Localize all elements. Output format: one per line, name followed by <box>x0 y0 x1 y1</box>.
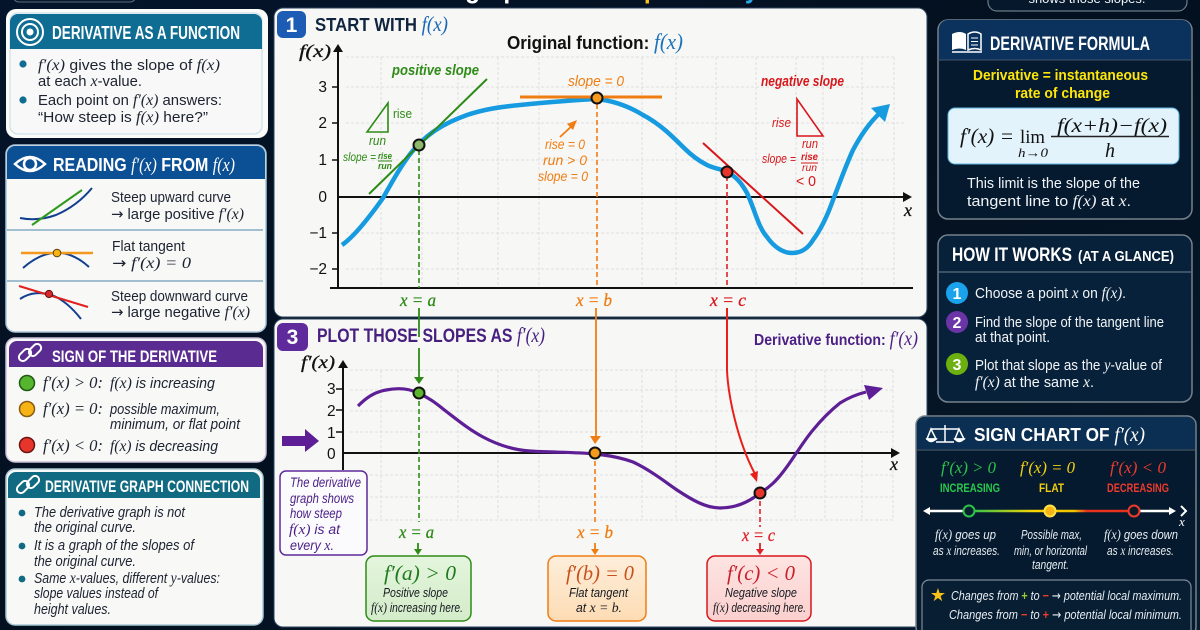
axes <box>330 44 913 288</box>
number line <box>923 506 1186 529</box>
item: flat: f′(x) = 0: <box>43 399 103 418</box>
row: flat tangent <box>21 238 191 272</box>
box: f'(c) < 0: f(x) decreasing here. <box>713 601 806 616</box>
bullet list: The derivative graph is not <box>34 505 186 521</box>
heading: how it works: (AT A GLANCE) <box>1078 249 1174 265</box>
bullets: at each x-value. <box>38 73 142 90</box>
x labels: x = a <box>399 290 436 310</box>
guides with arrows <box>418 393 760 551</box>
tangent: negative: rise <box>772 115 791 130</box>
panel: plot those slopes <box>274 319 927 627</box>
tangent: negative: negative slope <box>761 73 844 90</box>
step 1 <box>946 282 1126 304</box>
column: decreasing: DECREASING <box>1107 481 1169 495</box>
x labels: x = a <box>398 522 434 542</box>
x labels: x = b <box>575 290 612 310</box>
column: flat: min, or horizontal <box>1014 543 1088 558</box>
axis labels: 3 <box>318 79 327 96</box>
tangent: positive: rise <box>393 106 412 121</box>
header: sign <box>9 341 263 367</box>
box: f'(b) = 0: f′(b) = 0 <box>566 561 634 585</box>
point a' <box>414 388 424 398</box>
curve f(x) <box>342 99 890 253</box>
icon: star: ★ <box>930 585 946 606</box>
point c <box>722 166 732 178</box>
callout: derivative graph <box>280 471 367 555</box>
item: decreasing <box>20 436 218 455</box>
arrowhead: a <box>414 549 422 555</box>
note box: Changes from + to − → potential local maximum. <box>951 588 1182 604</box>
chart: original function f(x) <box>299 41 913 310</box>
note box: Changes from − to + → potential local minimum. <box>949 607 1182 623</box>
tangent: negative: < 0 <box>796 173 816 190</box>
chart: derivative f'(x): f′(x) <box>301 352 335 373</box>
panel: sign of the derivative <box>6 338 266 462</box>
header: reading: READING f′(x) FROM f(x) <box>53 154 235 176</box>
icon: link <box>15 474 41 495</box>
text: instantaneous rate <box>973 67 1148 102</box>
box: f'(a) > 0: Positive slope <box>383 586 448 600</box>
item: increasing: f(x) is increasing <box>110 375 215 392</box>
row: steep upward curve: → large positive f′(x) <box>111 205 244 223</box>
bullets: f′(x) gives the slope of f(x) <box>38 57 220 74</box>
point a <box>414 140 424 150</box>
axis labels: 1 <box>318 152 327 169</box>
bullets: Each point on f′(x) answers: <box>38 92 222 109</box>
step 2 <box>946 311 1164 346</box>
header: formula <box>938 20 1192 60</box>
box: f'(c) < 0: f′(c) < 0 <box>727 561 795 585</box>
chart: derivative f'(x): x <box>889 454 898 474</box>
top-left cropped panel <box>13 0 136 2</box>
axis labels: −2 <box>309 261 327 278</box>
step 3 <box>946 353 1163 391</box>
row: steep downward curve: → large negative f′(x) <box>111 303 250 321</box>
x labels: x = c <box>709 290 746 310</box>
formula box: f(x+h)−f(x) <box>1057 115 1167 137</box>
tangent: negative: run <box>802 136 818 151</box>
header: sign chart <box>916 417 1196 450</box>
panel: start with f(x) <box>274 8 927 317</box>
callout: derivative graph: graph shows <box>290 491 354 506</box>
item: flat: possible maximum, <box>109 402 220 418</box>
row: steep upward curve: Steep upward curve <box>111 189 231 206</box>
text: instantaneous rate: Derivative = instantaneous <box>973 67 1148 84</box>
top-right cropped panel <box>988 0 1187 11</box>
tangent: positive: rise <box>378 151 393 162</box>
row: flat tangent: → f′(x) = 0 <box>112 254 191 272</box>
step 1: Choose a point x on f(x). <box>975 285 1126 302</box>
formula box: lim <box>1020 127 1045 148</box>
point b <box>592 92 602 104</box>
step 2: at that point. <box>975 329 1050 346</box>
tangent: positive <box>343 62 487 194</box>
panel: how it works <box>938 235 1192 402</box>
tangent: negative: rise <box>801 152 818 163</box>
tangent: flat: run > 0 <box>543 152 587 168</box>
axis labels: −1 <box>309 225 327 242</box>
text: limit note <box>967 175 1140 210</box>
heading: how it works: HOW IT WORKS <box>952 245 1072 266</box>
dashed guides <box>419 104 727 288</box>
column: decreasing: f′(x) < 0 <box>1110 458 1167 477</box>
chart title: derivative function: Derivative function: f′(x) <box>754 328 918 350</box>
header: derivative as a function: DERIVATIVE AS A FUNCTION <box>52 22 240 43</box>
column: increasing: f(x) goes up <box>935 527 996 543</box>
step 2: 2 <box>953 315 962 332</box>
tangent: flat: slope = 0 <box>538 168 588 184</box>
formula box <box>948 108 1179 164</box>
text: limit note: This limit is the slope of the <box>967 175 1140 192</box>
column: decreasing <box>1104 458 1178 559</box>
column: increasing: as x increases. <box>933 543 1000 559</box>
chart: derivative f'(x) <box>301 352 900 555</box>
row: steep downward curve <box>19 286 250 321</box>
chart title: original function: Original function: f(x) <box>507 29 683 54</box>
icon: eye <box>15 157 45 171</box>
x labels <box>399 290 746 310</box>
step 1: 1 <box>953 286 962 303</box>
step 2: Find the slope of the tangent line <box>975 314 1164 331</box>
tangent: negative: run <box>802 163 817 174</box>
axis labels: 3 <box>327 381 336 398</box>
callout: derivative graph: The derivative <box>290 475 361 490</box>
step 3: f′(x) at the same x. <box>975 374 1094 391</box>
bullet list: the original curve. <box>34 520 136 536</box>
chart: original function f(x): x <box>903 200 912 220</box>
step 3: Plot that slope as the y-value of <box>975 357 1163 374</box>
column: increasing: f′(x) > 0 <box>941 458 997 477</box>
axis labels <box>327 381 336 463</box>
arrowhead: c <box>756 549 764 555</box>
column: flat <box>1014 458 1088 572</box>
item: increasing <box>20 373 215 392</box>
text: instantaneous rate: rate of change <box>1015 85 1110 102</box>
badge: step 1 <box>277 11 306 38</box>
panel: derivative formula <box>938 20 1192 219</box>
heading: how it works <box>952 245 1174 266</box>
axis labels: 1 <box>327 425 336 442</box>
x labels: x = c <box>741 525 775 545</box>
box: f'(a) > 0 <box>366 556 471 621</box>
item: increasing: f′(x) > 0: <box>43 373 103 392</box>
header: reading <box>7 146 265 179</box>
tangent: positive: run <box>369 133 386 148</box>
point c' <box>754 488 766 498</box>
chart: original function f(x): f(x) <box>299 41 331 62</box>
box: f'(b) = 0: Flat tangent <box>569 586 628 600</box>
column: flat: Possible max, <box>1021 527 1082 542</box>
header: derivative as a function <box>10 14 262 49</box>
tangent: positive: slope = <box>343 150 376 164</box>
bullet list: slope values instead of <box>34 586 160 602</box>
item: flat: minimum, or flat point <box>110 417 241 433</box>
row: steep upward curve <box>20 188 244 225</box>
arrowhead: b <box>591 549 599 555</box>
header: connection <box>8 472 260 498</box>
heading: plot those slopes: PLOT THOSE SLOPES AS f′(x) <box>317 323 545 347</box>
axis labels: 0 <box>318 189 327 206</box>
badge: step 3 <box>277 323 308 351</box>
connector arrows between graphs <box>414 308 758 482</box>
tangent: flat: slope = 0 <box>568 73 625 90</box>
header: sign: SIGN OF THE DERIVATIVE <box>52 347 217 366</box>
step 3: 3 <box>953 357 962 374</box>
box: f'(c) < 0: Negative slope <box>725 586 797 600</box>
formula box: f′(x) = <box>960 124 1014 148</box>
tangent: positive: run <box>378 161 392 172</box>
column: increasing <box>933 458 1000 559</box>
row: steep downward curve: Steep downward curve <box>111 288 248 305</box>
column: increasing: INCREASING <box>940 481 1000 495</box>
number line: x <box>1178 514 1185 529</box>
icon: target <box>17 19 43 45</box>
bullet list: Same x-values, different y-values: <box>34 570 220 587</box>
axis labels: 2 <box>318 115 327 132</box>
axis labels: 0 <box>327 446 336 463</box>
column: flat: tangent. <box>1032 557 1069 572</box>
bullet list: height values. <box>34 602 111 618</box>
bullets <box>19 57 222 126</box>
panel: reading f'(x) from f(x) <box>6 145 266 332</box>
column: flat: f′(x) = 0 <box>1020 458 1076 477</box>
curve f'(x) <box>358 385 883 508</box>
item: decreasing: f′(x) < 0: <box>43 436 103 455</box>
x labels: x = b <box>576 522 613 542</box>
callout: derivative graph: f(x) is at <box>289 522 341 538</box>
header: formula: DERIVATIVE FORMULA <box>990 34 1150 55</box>
bullet list: the original curve. <box>34 554 136 570</box>
callout: derivative graph: every x. <box>290 538 334 554</box>
formula box: h→0 <box>1018 145 1049 160</box>
box: f'(a) > 0: f′(a) > 0 <box>384 561 457 585</box>
panel: derivative as a function <box>6 9 268 138</box>
box: f'(b) = 0: at x = b. <box>576 601 622 616</box>
axis labels: 2 <box>327 403 336 420</box>
badge: step 3: 3 <box>287 326 298 349</box>
item: decreasing: f(x) is decreasing <box>110 438 218 455</box>
icon: scales <box>927 425 964 442</box>
axes <box>336 360 900 470</box>
row: flat tangent: Flat tangent <box>112 238 186 255</box>
heading: start with f(x): START WITH f(x) <box>315 12 448 36</box>
arrow: purple <box>282 429 319 452</box>
tangent: negative <box>703 73 844 234</box>
icon: book <box>952 32 982 52</box>
badge: step 1: 1 <box>286 14 298 37</box>
tangent: negative: slope = <box>762 151 796 166</box>
formula box: h <box>1105 140 1115 162</box>
column: decreasing: as x increases. <box>1107 543 1174 559</box>
note box <box>922 580 1191 630</box>
tangent: flat: rise = 0 <box>545 136 585 152</box>
header: connection: DERIVATIVE GRAPH CONNECTION <box>45 477 249 496</box>
bullet list <box>19 505 220 618</box>
x labels <box>398 522 775 545</box>
column: flat: FLAT <box>1039 481 1065 495</box>
callout: derivative graph: how steep <box>290 506 342 521</box>
box: f'(c) < 0 <box>707 556 811 621</box>
icon: link <box>17 342 43 363</box>
box: f'(a) > 0: f(x) increasing here. <box>371 601 463 616</box>
header: sign chart: SIGN CHART OF f′(x) <box>974 424 1145 446</box>
bullets: “How steep is f(x) here?” <box>38 109 208 126</box>
box: f'(b) = 0 <box>548 556 646 621</box>
tangent: flat <box>520 73 662 184</box>
point b' <box>590 448 600 458</box>
item: flat <box>20 399 241 433</box>
panel: sign chart <box>916 416 1196 630</box>
bullet list: It is a graph of the slopes of <box>34 538 196 554</box>
tangent: positive: positive slope <box>391 62 479 79</box>
column: decreasing: f(x) goes down <box>1104 527 1178 543</box>
text: limit note: tangent line to f(x) at x. <box>967 193 1131 210</box>
axis labels <box>309 79 327 278</box>
panel: derivative graph connection <box>6 469 263 625</box>
